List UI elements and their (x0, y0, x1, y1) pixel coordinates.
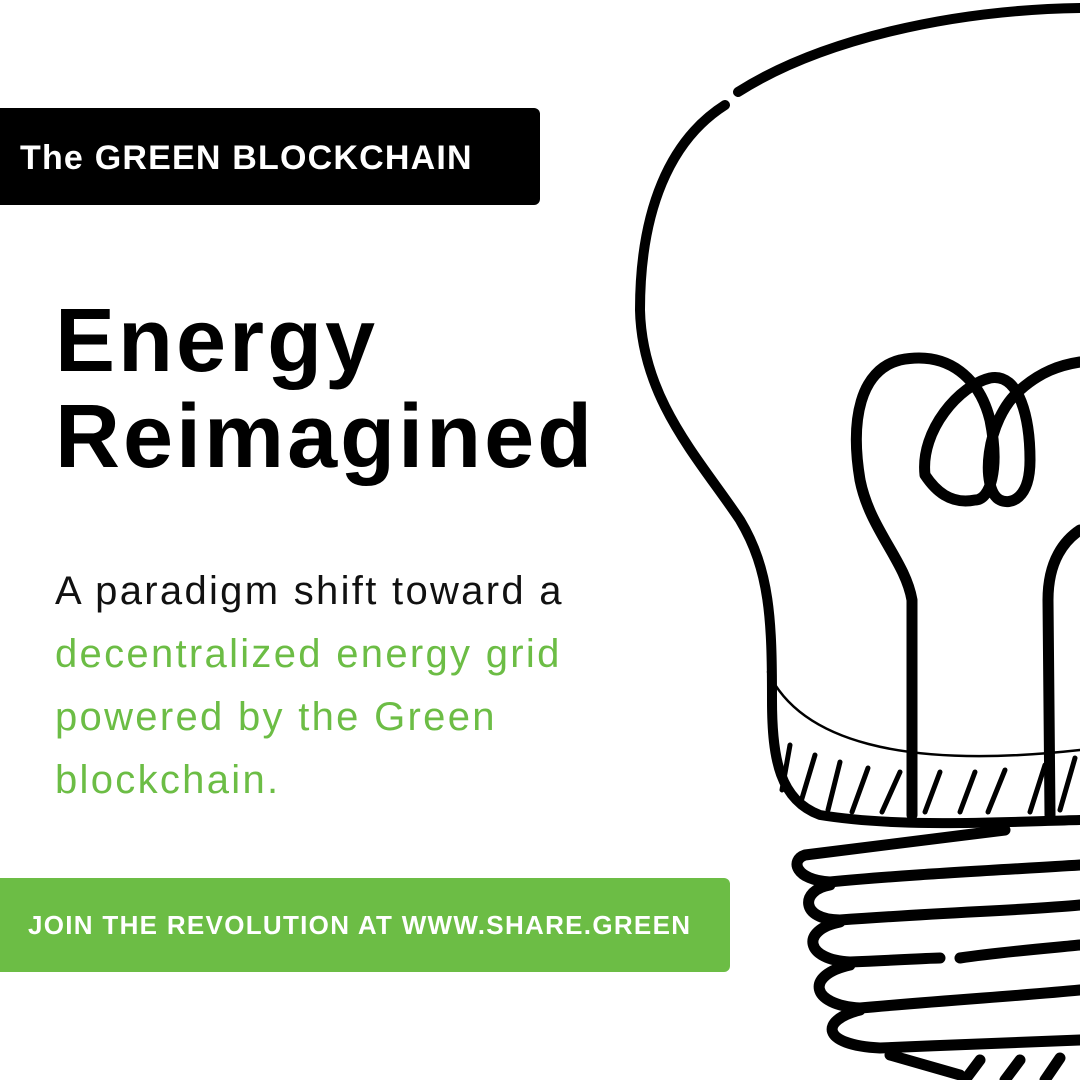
subtitle text: blockchain. (55, 758, 280, 802)
badge: The GREEN BLOCKCHAIN: The GREEN BLOCKCHAIN (20, 139, 473, 177)
badge: The GREEN BLOCKCHAIN (0, 108, 540, 205)
title: Energy (55, 291, 378, 391)
call-to-action button: JOIN THE REVOLUTION AT WWW.SHARE.GREEN (28, 910, 691, 940)
title: Reimagined (55, 387, 595, 487)
rim ticks (782, 745, 1075, 812)
call-to-action button (0, 878, 730, 972)
filament (856, 358, 1080, 815)
bulb glass outline (640, 8, 1080, 823)
subtitle text (55, 569, 564, 802)
subtitle text: powered by the Green (55, 695, 497, 739)
glass bottom rim (768, 672, 1080, 756)
title (55, 291, 595, 487)
subtitle text: decentralized energy grid (55, 632, 562, 676)
screw base bands (797, 830, 1080, 1080)
subtitle text: A paradigm shift toward a (55, 569, 564, 613)
